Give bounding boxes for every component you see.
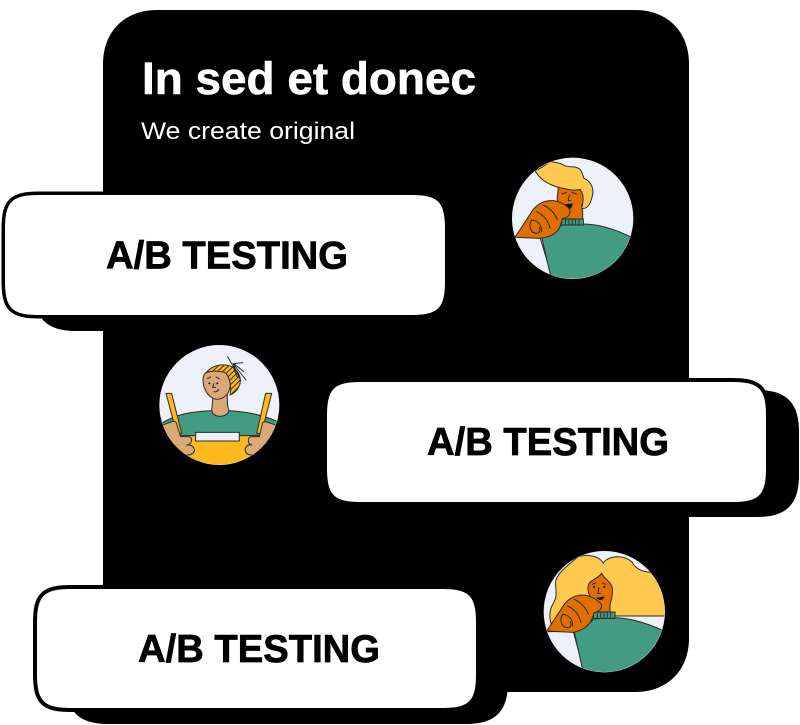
card 3: A/B testing [37, 589, 508, 724]
card 2: A/B testing: A/B TESTING [427, 421, 669, 464]
panel: black background card [103, 10, 689, 692]
card 2: A/B testing [327, 382, 799, 517]
card 1: A/B testing: A/B TESTING [106, 234, 348, 278]
card 3: A/B testing: A/B TESTING [138, 628, 380, 671]
title: In sed et donec [142, 53, 476, 104]
avatar: person holding board [157, 345, 282, 473]
card 1: A/B testing [5, 195, 470, 331]
avatar: person with long hair and raised fist [543, 551, 668, 682]
avatar: person with raised fist [512, 158, 633, 287]
subtitle: We create original [141, 118, 355, 145]
